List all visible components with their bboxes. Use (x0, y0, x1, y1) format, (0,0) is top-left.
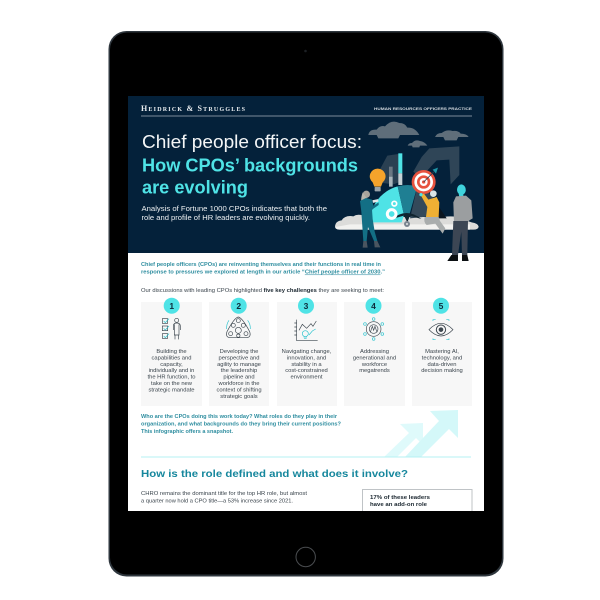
callout box: 17% of these leaders (370, 495, 430, 501)
question paragraph: This infographic offers a snapshot. (141, 429, 234, 435)
practice label: HUMAN RESOURCES OFFICERS PRACTICE (374, 106, 472, 111)
intro paragraph: response to pressures we explored at length in our article “ Chief people officer of 2030 .” (141, 270, 385, 276)
kneeling figure (419, 190, 445, 234)
tablet mockup with infographic (108, 31, 504, 576)
card 1 (148, 298, 196, 392)
text 2: perspective and (219, 355, 259, 361)
text 3: environment (291, 375, 323, 381)
text 1: take on the new (151, 381, 193, 387)
callout box: have an add-on role (370, 502, 428, 508)
title: Chief people officer focus: (142, 131, 362, 152)
card 2 (216, 298, 262, 399)
gears (387, 201, 397, 218)
section heading: How is the role defined and what does it involve? (141, 468, 408, 480)
lightbulb (370, 169, 386, 191)
text 5: data-driven (427, 362, 457, 368)
clouds (368, 122, 469, 147)
target (412, 168, 438, 194)
bars (389, 153, 402, 187)
decorative arrows (384, 410, 458, 457)
text 1: strategic mandate (148, 387, 195, 393)
icon: eye (429, 320, 453, 340)
text 2: strategic goals (220, 394, 258, 400)
camera (304, 50, 307, 52)
title: are evolving (142, 176, 248, 198)
card 4 (353, 298, 396, 373)
subtitle: role and profile of HR leaders are evolving quickly. (142, 213, 310, 222)
gauge (370, 185, 447, 227)
header panel (128, 96, 484, 253)
illustration (335, 122, 479, 261)
title: How CPOs’ backgrounds (142, 154, 358, 176)
question paragraph (141, 414, 341, 435)
number 4: 4 (371, 301, 376, 311)
text 1: capabilities and (152, 355, 191, 361)
number 3: 3 (304, 301, 309, 311)
text 5: Mastering AI, (425, 349, 459, 355)
woman figure (360, 191, 380, 248)
man figure (447, 184, 473, 261)
text 2: Developing the (220, 349, 258, 355)
card 3 (282, 298, 331, 378)
intro paragraph: Chief people officers (CPOs) are reinventing themselves and their functions in real time in (141, 262, 381, 268)
question paragraph: Who are the CPOs doing this work today? What roles do they play in their (141, 414, 337, 420)
text 2: pipeline and (223, 375, 255, 381)
icon: workforce network (364, 318, 384, 340)
body text: CHRO remains the dominant title for the top HR role, but almost (141, 491, 307, 497)
screen (128, 96, 484, 530)
text 5: technology, and (422, 355, 462, 361)
text 4: generational and (353, 355, 396, 361)
text 2: the leadership (221, 368, 257, 374)
text 1: the HR function, to (147, 375, 196, 381)
text 3: stability in a (291, 362, 322, 368)
text 4: workforce (361, 362, 387, 368)
text 3: Navigating change, (282, 349, 332, 355)
growth arrows (373, 146, 459, 184)
tablet frame (108, 31, 504, 576)
text 2: context of shifting (216, 387, 262, 393)
text 1: capacity, (160, 362, 183, 368)
question paragraph: organization, and what backgrounds do they bring their current positions? (141, 422, 341, 428)
card 5 (422, 298, 462, 373)
cloud base (335, 215, 479, 230)
number 5: 5 (439, 301, 444, 311)
intro paragraph (141, 262, 385, 276)
text 2: agility to manage (217, 362, 261, 368)
icon: checklist and person (162, 318, 180, 339)
number 2: 2 (236, 301, 241, 311)
subtitle (142, 206, 327, 222)
text 1: individually and in (149, 368, 194, 374)
callout box (362, 490, 472, 530)
text 3: innovation, and (287, 355, 326, 361)
subtitle: Analysis of Fortune 1000 CPOs indicates that both the (142, 204, 327, 213)
text 2: workforce in the (218, 381, 259, 387)
icon: chart with bulb (294, 320, 318, 340)
number 1: 1 (169, 301, 174, 311)
text 5: decision making (421, 368, 463, 374)
text 1: Building the (156, 349, 187, 355)
text 3: cost-constrained (285, 368, 328, 374)
title (142, 131, 362, 198)
text 4: megatrends (359, 368, 390, 374)
logo: Heidrick & Struggles (141, 104, 246, 113)
screen content (128, 96, 484, 530)
challenges intro: Our discussions with leading CPOs highlighted five key challenges they are seeking to meet: (141, 288, 384, 294)
body text (141, 491, 307, 504)
body text: a quarter now hold a CPO title—a 53% increase since 2021. (141, 498, 293, 504)
home button (296, 547, 315, 567)
icon: team triangle (226, 317, 250, 338)
text 4: Addressing (360, 349, 389, 355)
